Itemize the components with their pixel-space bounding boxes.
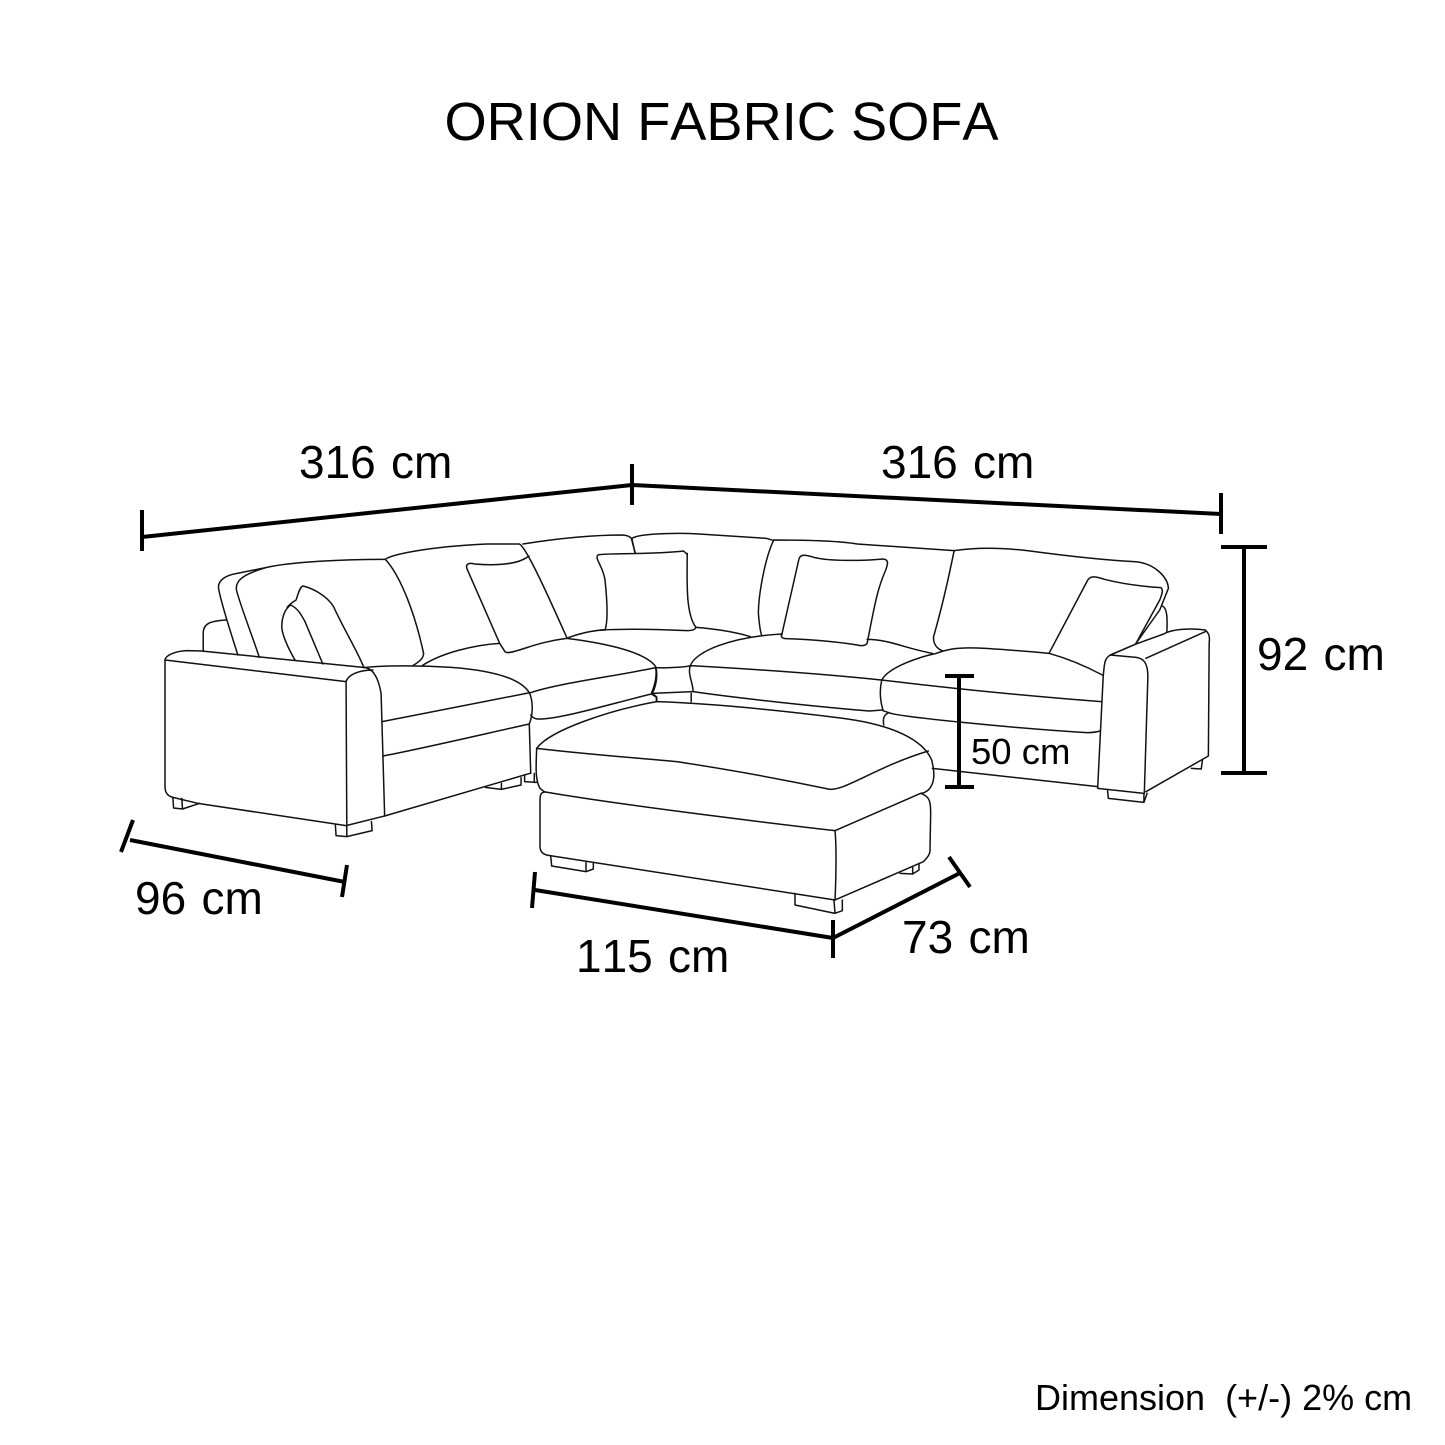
dimension: sofa depth: 96 cm [135, 872, 263, 924]
dimension: ottoman width: 115 cm [576, 930, 729, 982]
title: ORION FABRIC SOFA [445, 92, 999, 152]
dimension: back left width [142, 436, 632, 551]
footnote: Dimension (+/-) 2% cm [1035, 1377, 1412, 1418]
dimension: back right width [632, 436, 1221, 534]
dimension: total height: 92 cm [1257, 628, 1385, 680]
sofa left section [165, 535, 687, 837]
dimension: seat height: 50 cm [971, 731, 1070, 772]
dimension: ottoman width [532, 872, 833, 982]
dimension: ottoman depth: 73 cm [902, 911, 1030, 963]
ottoman [536, 702, 934, 913]
dimension: seat height [945, 676, 1070, 787]
sofa illustration [165, 533, 1209, 913]
dimension: back right width: 316 cm [881, 436, 1034, 488]
dimension: ottoman depth [833, 857, 1030, 963]
sofa right section [600, 533, 1209, 802]
dimension: back left width: 316 cm [299, 436, 452, 488]
dimension: sofa depth [121, 820, 347, 924]
